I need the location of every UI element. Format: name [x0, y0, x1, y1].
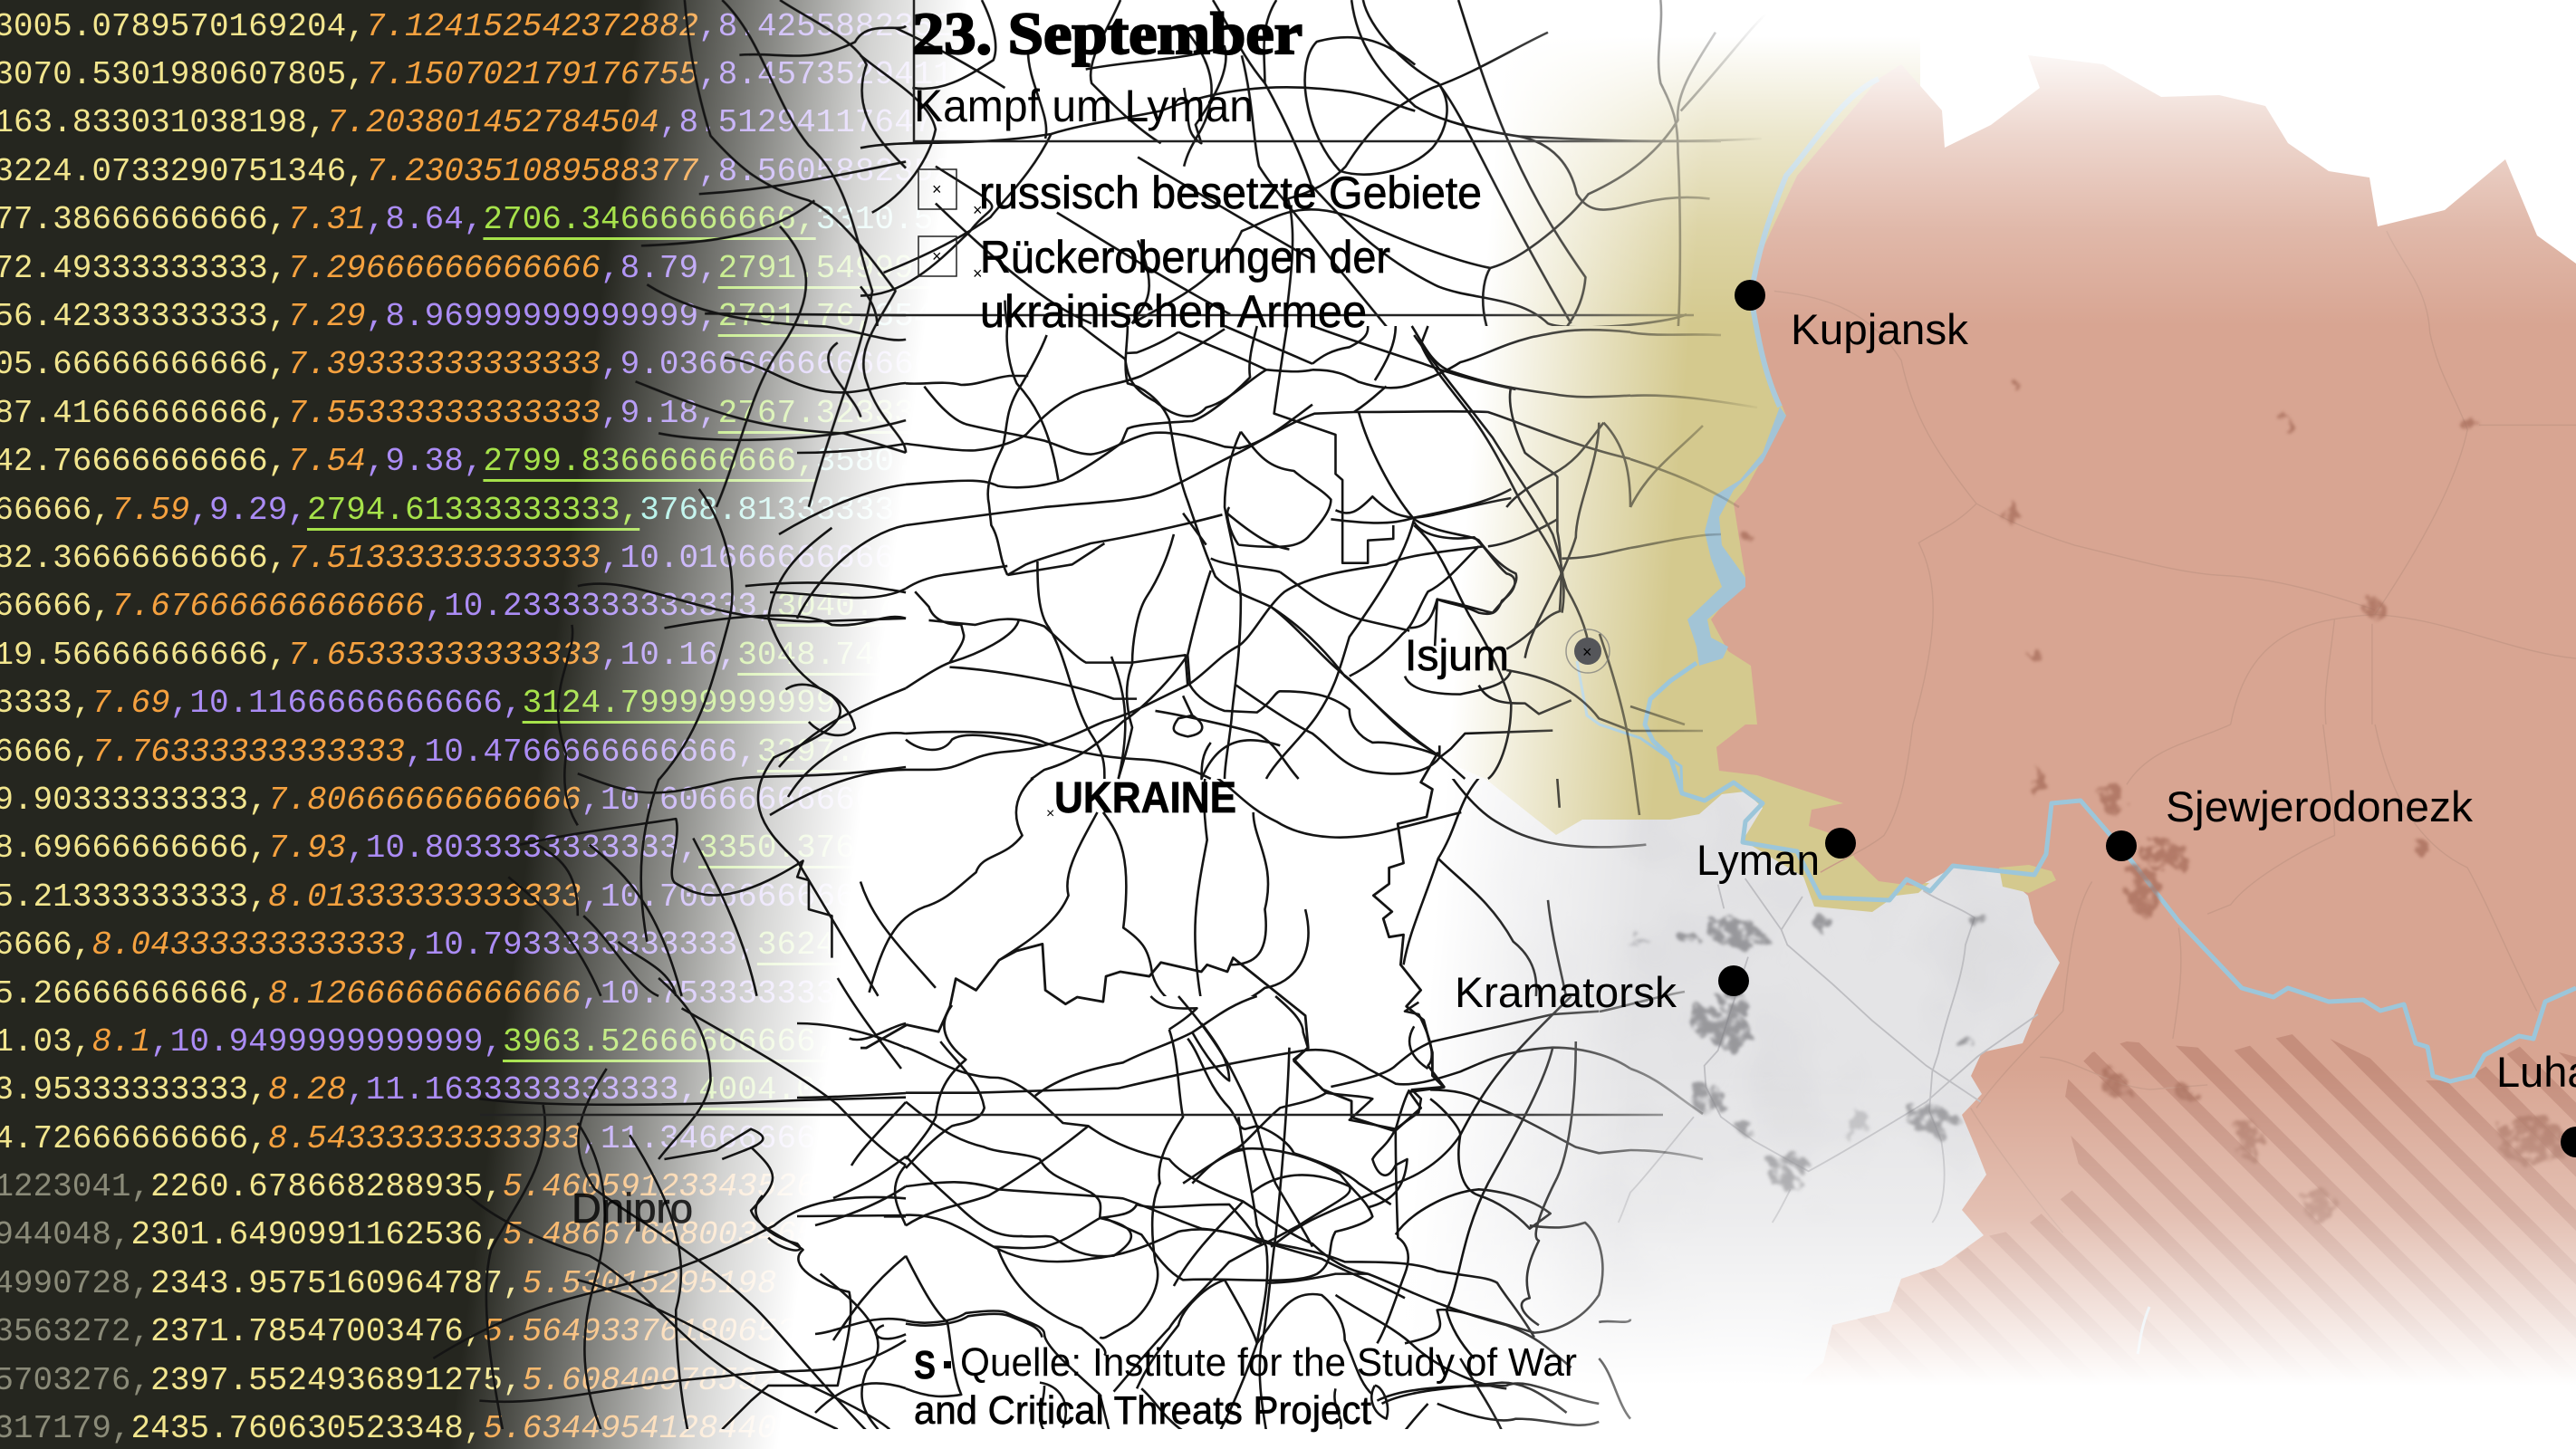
roads: lower left: [433, 978, 906, 1431]
country label: UKRAINE: [1054, 774, 1236, 822]
text block: CSV numbers: 5.26666666666,8.12666666666666,10.7533333333333: [0, 974, 914, 1012]
title: 23. September: [912, 1, 1302, 67]
Kupjansk label: Kupjansk: [1791, 305, 1968, 353]
Luhansk dot: [2561, 1127, 2576, 1157]
legend swatch: reconquered areas: [918, 236, 956, 276]
Isjum dot: [1574, 638, 1601, 665]
panel: code editor with CSV data: [0, 0, 996, 1449]
publisher logo bullet: [944, 1361, 951, 1368]
text block: CSV numbers: 19.56666666666,7.65333333333333,10.16,3048.74666666: [0, 637, 992, 674]
roads: around Isjum and Ukraine label: [906, 326, 1630, 779]
city: Luhansk: [2496, 1048, 2576, 1157]
fade: top edge of map: [906, 0, 2576, 362]
minor roads in occupied territory: [1774, 231, 2576, 724]
legend swatch: occupied areas: [918, 169, 956, 209]
Sjewjerodonezk label: Sjewjerodonezk: [2166, 782, 2473, 830]
legend label: russisch besetzte Gebiete: [979, 168, 1482, 218]
minor roads in Ukrainian-held territory: [1619, 878, 2038, 1223]
Lyman dot: [1825, 828, 1856, 859]
source line one: Quelle: Institute for the Study of War: [960, 1340, 1577, 1385]
area: reconquered territory: [1268, 0, 1929, 912]
text block: CSV numbers: 66666,7.67666666666666,10.2333333333333,3040.7: [0, 588, 894, 625]
roads: upper left fading into code: [636, 0, 906, 507]
source line two: and Critical Threats Project: [914, 1388, 1371, 1433]
text block: CSV numbers: 8.69666666666,7.93,10.8033333333333,3350.37666: [0, 830, 894, 867]
roads: upper centre: [860, 0, 1757, 326]
text block: CSV numbers: 944048,2301.6490991162536,5.48667668003465: [0, 1216, 816, 1253]
text block: CSV numbers: 5.21333333333,8.01333333333333,10.7066666666666: [0, 878, 914, 916]
text block: CSV numbers: 77.38666666666,7.31,8.64,2706.34666666666,3310.5: [0, 201, 933, 238]
text block: CSV numbers: 4990728,2343.9575160964787,5.53015295198: [0, 1265, 776, 1302]
roads: connectors across centre left and right: [725, 332, 1757, 1413]
text block: CSV numbers: 05.66666666666,7.39333333333333,9.03666666666666,: [0, 346, 953, 383]
roads: middle left: [508, 489, 906, 996]
text block: CSV numbers: 3563272,2371.78547003476,5.56493376180652: [0, 1313, 796, 1350]
text block: CSV numbers: 3070.5301980607805,7.150702179176755,8.457352941176: [0, 56, 992, 93]
country marker: ×: [1046, 806, 1054, 821]
Sjewjerodonezk dot: [2106, 830, 2137, 861]
Isjum label: Isjum: [1405, 632, 1509, 680]
text block: CSV numbers: 3224.0733290751346,7.230351089588377,8.560588235294: [0, 153, 992, 190]
text block: CSV numbers: 9.90333333333,7.80666666666666,10.6066666666666: [0, 782, 914, 819]
swatch marker: ×: [932, 247, 942, 265]
city footprints, Ukrainian-held: [1624, 908, 1986, 1191]
area: Russian-occupied territory: [1711, 55, 2576, 1449]
header and legend frame rules: [480, 0, 1721, 1115]
hatched area: occupied since 2014: [1812, 1030, 2576, 1413]
city: Lyman: [1697, 828, 1856, 884]
oblast border: [860, 753, 1444, 1131]
area: reconquered patch east of Lyman: [1999, 865, 2056, 893]
text block: CSV numbers: 6666,8.04333333333333,10.7933333333333,3624.5: [0, 926, 875, 964]
Lyman label: Lyman: [1697, 836, 1820, 884]
Isjum marker: ×: [1582, 643, 1592, 661]
text block: CSV numbers: 317179,2435.760630523348,5.63449541284404: [0, 1410, 796, 1447]
river: Oskil and Siwerskyj Donez: [1577, 79, 2576, 1354]
Kramatorsk dot: [1718, 965, 1749, 996]
legend marker: ×: [973, 264, 983, 283]
city: Kupjansk: [1735, 280, 1968, 353]
text block: CSV numbers: 1223041,2260.678668288935,5.46059123343526: [0, 1168, 816, 1205]
city: Kramatorsk: [1455, 965, 1749, 1016]
text block: CSV numbers: 4.72666666666,8.54333333333333,11.3466666666: [0, 1120, 855, 1157]
area: Ukrainian-held territory: [1177, 770, 2083, 1449]
text block: CSV numbers: 87.41666666666,7.55333333333333,9.18,2767.32333333,: [0, 395, 992, 432]
Kupjansk dot: [1735, 280, 1765, 311]
road network: [433, 0, 1766, 1431]
legend label line two: ukrainischen Armee: [980, 286, 1367, 337]
fade: code panel dissolving to white: [0, 0, 996, 1449]
Isjum ring: [1566, 629, 1610, 673]
text block: CSV numbers: 3005.0789570169204,7.124152542372882,8.425588235294: [0, 8, 992, 45]
subtitle: Kampf um Lyman: [914, 81, 1254, 131]
text block: CSV numbers: 56.42333333333,7.29,8.96999999999999,2791.76,3540.5: [0, 298, 992, 335]
city: Sjewjerodonezk: [2106, 782, 2473, 861]
text block: CSV numbers: 82.36666666666,7.51333333333333,10.0166666666666,: [0, 540, 953, 577]
text block: CSV numbers: 163.833031038198,7.203801452784504,8.512941176470: [0, 104, 953, 141]
text block: CSV numbers: 1.03,8.1,10.9499999999999,3963.52666666666,: [0, 1023, 835, 1060]
legend: Rückeroberungen der ukrainischen Armee: [918, 232, 1390, 337]
text block: CSV numbers: [0, 8, 996, 1447]
text block: CSV numbers: 3.95333333333,8.28,11.1633333333333,4004.03: [0, 1071, 835, 1108]
minor roads, lower occupied map: [1821, 724, 2537, 1233]
fade: bottom edge of map: [906, 1041, 2576, 1449]
publisher logo letter: S: [914, 1343, 936, 1387]
legend label line one: Rückeroberungen der: [980, 232, 1390, 283]
Kramatorsk label: Kramatorsk: [1455, 968, 1677, 1016]
fade: left edge of map: [906, 0, 1993, 1449]
text block: CSV numbers: 3333,7.69,10.1166666666666,3124.79999999999,: [0, 685, 855, 722]
roads: central band: [859, 779, 1647, 996]
city label: Dnipro: Dnipro: [572, 1185, 693, 1232]
text block: CSV numbers: 5703276,2397.5524936891275,5.60840978592: [0, 1362, 776, 1399]
city footprints, occupied: [1744, 379, 2565, 1222]
source credit: [914, 1340, 1577, 1433]
text block: CSV numbers: 42.76666666666,7.54,9.38,2799.83666666666,3580.1: [0, 443, 933, 480]
text block: CSV numbers: 6666,7.76333333333333,10.4766666666666,3297.73: [0, 734, 894, 771]
text block: CSV numbers: 66666,7.59,9.29,2794.61333333333,3768.81333333: [0, 492, 894, 529]
city label: Isjum with marker: [1405, 629, 1610, 680]
legend: russisch besetzte Gebiete: [918, 168, 1482, 219]
swatch marker: ×: [932, 180, 942, 198]
legend marker: ×: [973, 201, 983, 219]
roads: lower centre: [906, 996, 1630, 1431]
